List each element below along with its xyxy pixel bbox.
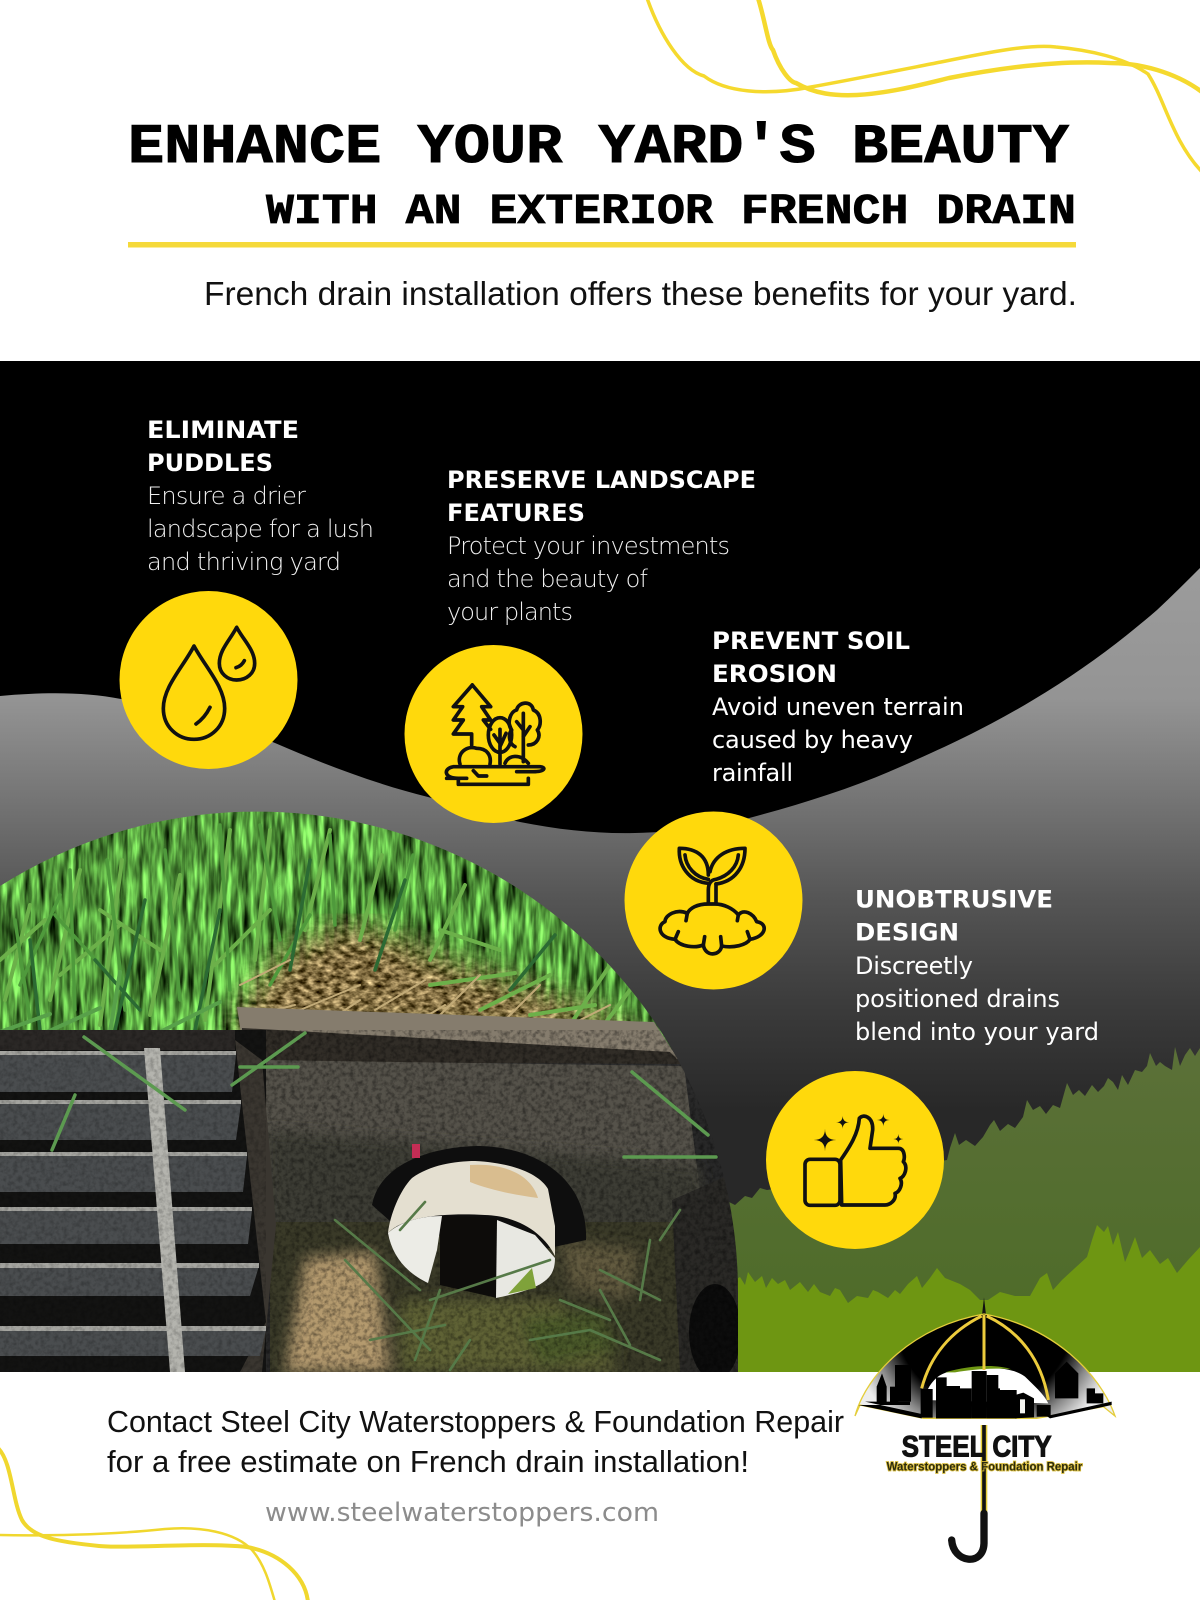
left grass foot	[0, 972, 220, 1033]
dry straw texture	[218, 914, 650, 1030]
description line 3: and thriving yard	[147, 548, 341, 576]
heading: ELIMINATE	[147, 416, 299, 444]
description: Discreetly	[855, 952, 973, 980]
title underline	[128, 242, 1076, 248]
heading line 2: EROSION	[712, 660, 837, 688]
umbrella ribs	[922, 1315, 1048, 1400]
floor grass	[335, 1202, 680, 1370]
icon circle: water drops	[120, 591, 298, 769]
logo name: STEEL CITY	[902, 1431, 1052, 1464]
benefit 2: preserve landscape features	[447, 466, 756, 626]
description line 3: your plants	[447, 598, 573, 626]
heading: UNOBTRUSIVE	[855, 886, 1053, 914]
description: Avoid uneven terrain	[712, 693, 964, 721]
drain pipe	[372, 1144, 586, 1298]
icon circle: sprout in soil	[624, 812, 802, 990]
title line 1: ENHANCE YOUR YARD'S BEAUTY	[128, 115, 1069, 179]
umbrella tip	[982, 1297, 986, 1315]
canopy opening	[923, 1368, 1048, 1403]
benefit 1: eliminate puddles	[147, 416, 374, 576]
website url: www.steelwaterstoppers.com	[265, 1498, 659, 1528]
skyline	[858, 1362, 1112, 1418]
canopy	[855, 1314, 1115, 1418]
pipe inner left	[388, 1216, 442, 1283]
heading line 2: PUDDLES	[147, 449, 273, 477]
grass blades: mid	[15, 825, 413, 1020]
pipe outer surface	[388, 1161, 555, 1256]
grass texture	[0, 812, 672, 1050]
umbrella handle	[974, 1425, 994, 1517]
description: Ensure a drier	[147, 482, 306, 510]
icon circle: trees and landscape	[404, 645, 582, 823]
description line 2: positioned drains	[855, 985, 1060, 1013]
contact line 1: Contact Steel City Waterstoppers & Foundation Repair	[107, 1404, 844, 1439]
benefit 4: unobtrusive design	[855, 886, 1099, 1046]
black band panel	[0, 361, 1200, 1372]
call to action	[107, 1404, 844, 1479]
heading: PRESERVE LANDSCAPE	[447, 466, 756, 494]
description line 3: blend into your yard	[855, 1018, 1099, 1046]
top decorative yellow squiggle	[647, 0, 1200, 172]
stone texture	[235, 1030, 745, 1372]
grate bars	[0, 1055, 266, 1356]
bottom-left yellow squiggle	[0, 1448, 308, 1600]
pipe opening	[440, 1236, 497, 1298]
logo tagline: Waterstoppers & Foundation Repair	[887, 1459, 1083, 1473]
benefit 3: prevent soil erosion	[712, 627, 964, 787]
metal grate	[0, 1030, 276, 1372]
grate side wall	[235, 1040, 276, 1372]
grey wave	[0, 568, 1200, 1372]
light green hill	[730, 1225, 1200, 1372]
floor	[270, 1222, 715, 1372]
heading line 2: DESIGN	[855, 918, 959, 946]
grate vertical bar	[144, 1048, 185, 1372]
grass blades: bright	[0, 830, 630, 1030]
photo: drain outlet and grate	[0, 800, 745, 1380]
dry straw strands	[240, 960, 610, 1020]
logo: Steel City umbrella	[855, 1297, 1115, 1559]
title line 2: WITH AN EXTERIOR FRENCH DRAIN	[266, 187, 1076, 236]
icon circle: thumbs up	[766, 1071, 944, 1249]
concrete wall	[237, 1007, 678, 1059]
grass blades: deep	[30, 860, 555, 1030]
right dark wall	[672, 1186, 738, 1372]
pipe inner right	[496, 1220, 555, 1298]
heading: PREVENT SOIL	[712, 627, 910, 655]
description line 2: landscape for a lush	[147, 515, 374, 543]
description: Protect your investments	[447, 532, 730, 560]
heading line 2: FEATURES	[447, 499, 585, 527]
description line 2: and the beauty of	[447, 565, 649, 593]
description line 3: rainfall	[712, 759, 793, 787]
foreground blades	[52, 1033, 716, 1157]
pipe collar	[372, 1146, 586, 1250]
dark green hill	[725, 1047, 1200, 1372]
pipe stain	[470, 1165, 538, 1198]
contact line 2: for a free estimate on French drain installation!	[107, 1444, 749, 1479]
description line 2: caused by heavy	[712, 726, 913, 754]
subtitle: French drain installation offers these benefits for your yard.	[204, 275, 1077, 312]
